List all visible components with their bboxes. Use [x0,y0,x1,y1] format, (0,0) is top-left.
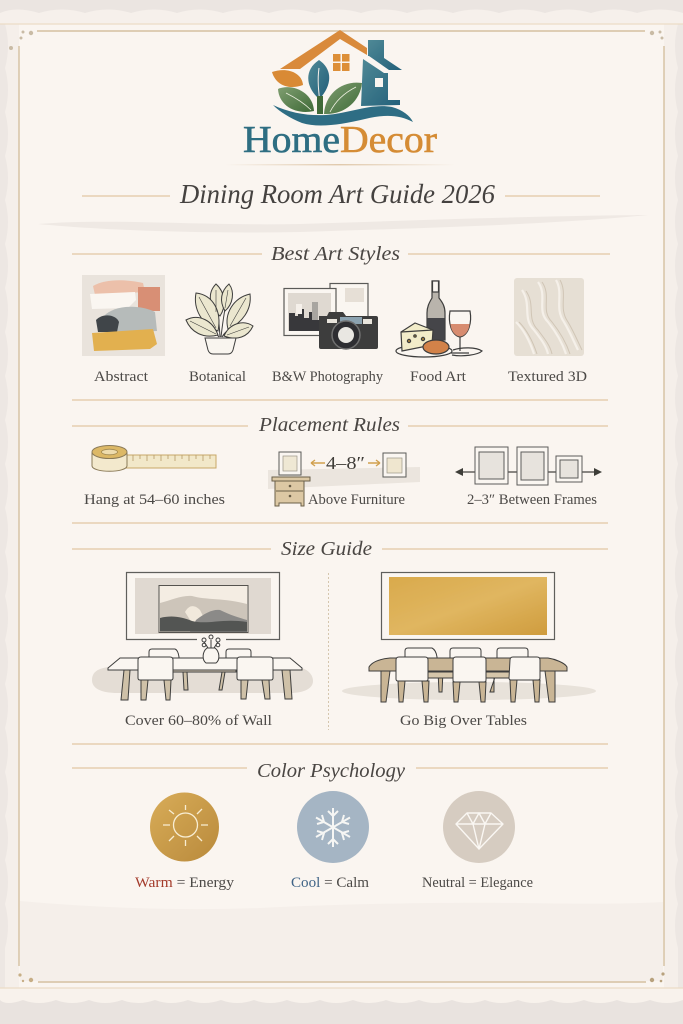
title brush swoosh [38,215,648,233]
lower wash panel [20,901,663,981]
label: 4-8 inches: 4–8″ [326,453,365,473]
label: go big: Go Big Over Tables [400,713,527,729]
label: cover wall: Cover 60–80% of Wall [125,713,272,729]
logo: HomeDecor [243,30,437,161]
icon: diamond [443,791,515,863]
icon: photo frames and camera [284,284,378,349]
label: Textured 3D: Textured 3D [508,369,587,385]
icon: nightstand [272,477,310,506]
icon: spacing arrows [311,460,380,466]
icon: abstract painting [82,275,165,356]
icon: orange leaf [272,70,303,87]
color: neutral [422,791,533,891]
label: neutral: Neutral = Elegance [422,875,533,891]
rule: hang height [84,446,225,508]
label: cool: Cool = Calm [291,875,370,891]
icon: textured relief [514,278,584,356]
floor shadow [342,682,596,700]
dining table and chairs [108,649,302,700]
icon: blue house [361,40,402,106]
icon: window [333,54,350,71]
art style: Botanical [186,284,253,385]
wall art frame [126,572,280,640]
color: cool [291,791,370,891]
floor shadow [92,667,313,693]
art style: Textured 3D [508,278,587,385]
icon: wave swoosh [273,105,413,126]
icon: potted plant [186,284,253,354]
icon: measuring tape [92,446,216,471]
label: Botanical: Botanical [189,369,246,385]
icon: vase with flowers [202,635,220,663]
color: warm [135,792,235,891]
label: above furniture: Above Furniture [308,492,405,508]
icon: arrow line [455,468,602,476]
gold wall art [382,572,554,640]
icon: right frame [383,453,406,477]
label: hang height: Hang at 54–60 inches [84,492,225,508]
rule: above furniture [268,452,420,508]
icon: three frames [475,447,582,485]
logo wordmark: HomeDecor [243,119,437,161]
heading: Placement Rules: Placement Rules [258,414,400,436]
label: B&W Photography: B&W Photography [272,369,384,385]
logo divider [225,164,455,165]
size guide: go big [342,572,596,729]
rule: between frames [455,447,602,508]
icon: sun [150,792,219,862]
icon: snowflake [297,791,369,863]
title: Dining Room Art Guide 2026 [179,179,495,209]
icon: house roof [280,30,367,69]
size guide: cover wall [92,572,313,729]
heading: Color Psychology: Color Psychology [257,760,405,782]
icon: left frame [279,452,301,475]
icon: wine, cheese and plate [396,281,482,357]
heading: Size Guide: Size Guide [281,538,372,560]
wall band [268,467,420,489]
heading: Best Art Styles: Best Art Styles [271,243,400,265]
icon: green leaves [278,87,314,112]
art style: B&W Photography [272,284,384,385]
art style: Food Art [396,281,482,385]
long table and chairs [369,648,567,702]
label: Abstract: Abstract [94,369,148,385]
icon: teal leaf [308,60,329,97]
label: warm: Warm = Energy [135,875,235,891]
label: Food Art: Food Art [410,369,466,385]
art style: Abstract [82,275,165,385]
label: between frames: 2–3″ Between Frames [467,492,597,508]
